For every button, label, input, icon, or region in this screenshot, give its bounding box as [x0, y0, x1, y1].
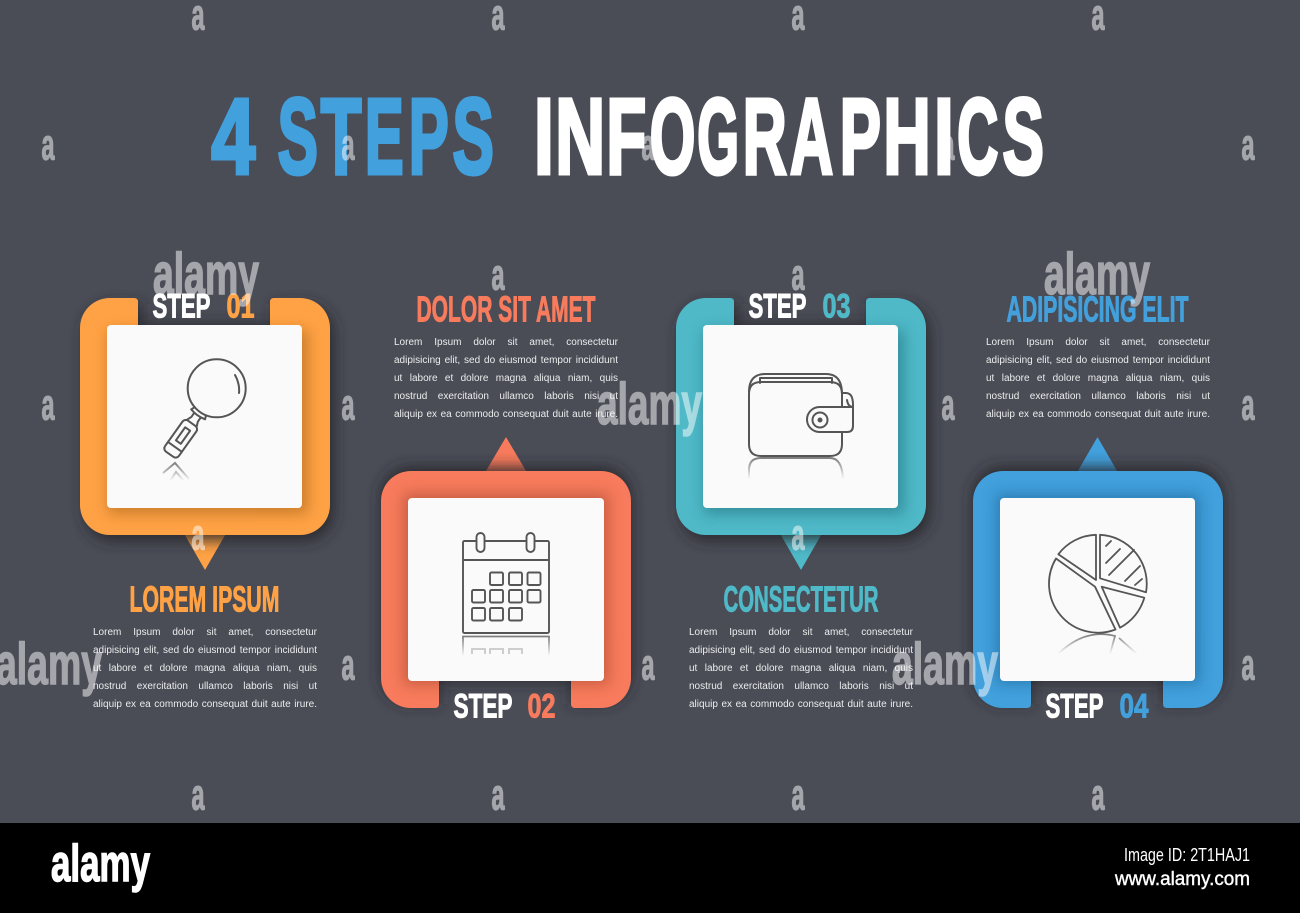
icon: wallet — [749, 374, 853, 456]
text: step 4 description: adipisicing elit, sed do eiusmod tempor incididunt — [986, 355, 1210, 366]
text: step 3 description: aliquip ex ea commodo consequat duit aute irure. — [689, 699, 913, 710]
icon: calendar — [463, 533, 549, 633]
footer logo: alamy — [51, 835, 150, 893]
label: step 02: 02 — [528, 688, 556, 726]
heading: dolor sit amet: DOLOR SIT AMET — [416, 288, 596, 330]
text: step 3 description: adipisicing elit, sed do eiusmod tempor incididunt — [689, 645, 913, 656]
label: step 02: STEP — [454, 688, 512, 726]
watermark pattern: alamy — [153, 242, 259, 307]
text: step 2 description: aliquip ex ea commodo consequat duit aute irure. — [394, 409, 618, 420]
watermark pattern: a — [492, 770, 505, 820]
text: step 1 description: adipisicing elit, sed do eiusmod tempor incididunt — [93, 645, 317, 656]
watermark pattern: a — [1092, 770, 1105, 820]
label: step 01: 01 — [226, 288, 254, 326]
icon: magnifying glass — [163, 359, 246, 459]
watermark pattern: alamy — [1044, 242, 1150, 307]
watermark pattern: a — [1242, 640, 1255, 690]
label: step 04: STEP — [1046, 688, 1104, 726]
title: E — [365, 76, 404, 196]
text: step 2 description: adipisicing elit, sed do eiusmod tempor incididunt — [394, 355, 618, 366]
text: step 3 description: Lorem Ipsum dolor sit amet, consectetur — [689, 627, 913, 638]
heading: consectetur: CONSECTETUR — [724, 578, 878, 620]
footer bar — [0, 823, 1300, 913]
watermark pattern: alamy — [597, 372, 702, 437]
card: step 3 — [703, 325, 898, 508]
image id: Image ID: 2T1HAJ1 — [1124, 845, 1250, 865]
frame: step 1 — [80, 298, 330, 535]
pointer: step 3 — [778, 530, 824, 570]
title: F — [606, 76, 646, 196]
label: step 03: 03 — [822, 288, 850, 326]
icon reflection: magnifying glass — [163, 463, 189, 481]
watermark pattern: a — [942, 380, 955, 430]
watermark pattern: a — [792, 510, 805, 560]
title: S — [1002, 76, 1044, 196]
title: T — [321, 76, 361, 196]
title: I — [934, 76, 954, 196]
card shadow: step 1 — [108, 330, 308, 514]
text: step 4 description: nostrud exercitation ullamco laboris nisi ut — [986, 391, 1210, 402]
frame shadow: step 4 — [973, 467, 1223, 704]
text: step 2 description: ut labore et dolore magna aliqua niam, quis — [394, 373, 618, 384]
title: P — [840, 76, 881, 196]
frame shadow: step 2 — [381, 467, 631, 704]
frame shadow: step 3 — [680, 304, 930, 541]
watermark pattern: a — [642, 640, 655, 690]
icon reflection: pie chart — [1058, 634, 1137, 654]
title: S — [452, 76, 494, 196]
watermark pattern: a — [792, 250, 805, 300]
title: P — [409, 76, 449, 196]
heading: lorem ipsum: LOREM IPSUM — [130, 578, 280, 620]
title: H — [883, 76, 931, 196]
card shadow: step 3 — [704, 330, 904, 514]
text: step 3 description: ut labore et dolore magna aliqua niam, quis — [689, 663, 913, 674]
text: step 2 description — [394, 334, 618, 424]
title: N — [555, 76, 605, 196]
watermark pattern: a — [192, 770, 205, 820]
watermark pattern: a — [342, 380, 355, 430]
watermark pattern: a — [942, 120, 955, 170]
panel: step 3 — [676, 288, 930, 714]
pointer: step 1 — [182, 530, 228, 570]
title: C — [957, 76, 998, 196]
watermark pattern: a — [342, 120, 355, 170]
text: step 3 description — [689, 624, 913, 714]
watermark pattern: a — [342, 640, 355, 690]
title: A — [790, 76, 833, 196]
card: step 2 — [408, 498, 604, 681]
frame: step 3 — [676, 298, 926, 535]
frame shadow: step 1 — [84, 304, 334, 541]
text: step 4 description: ut labore et dolore magna aliqua niam, quis — [986, 373, 1210, 384]
icon reflection: calendar — [463, 636, 549, 656]
card shadow: step 2 — [404, 494, 608, 684]
panel: step 1 — [80, 288, 334, 714]
text: step 2 description: Lorem Ipsum dolor sit amet, consectetur — [394, 337, 618, 348]
text: step 1 description: Lorem Ipsum dolor sit amet, consectetur — [93, 627, 317, 638]
label: step 01: STEP — [152, 288, 210, 326]
title: O — [650, 76, 695, 196]
text: step 4 description: aliquip ex ea commodo consequat duit aute irure. — [986, 409, 1210, 420]
title: R — [743, 76, 787, 196]
watermark pattern: a — [1242, 120, 1255, 170]
watermark pattern: a — [1242, 380, 1255, 430]
text: step 2 description: nostrud exercitation ullamco laboris nisi ut — [394, 391, 618, 402]
title: S — [278, 76, 318, 196]
label: step 04: 04 — [1120, 688, 1149, 726]
card: step 1 — [107, 325, 302, 508]
pointer: step 4 — [1075, 437, 1120, 476]
text: step 4 description: Lorem Ipsum dolor sit amet, consectetur — [986, 337, 1210, 348]
text: step 1 description: nostrud exercitation ullamco laboris nisi ut — [93, 681, 317, 692]
watermark pattern: alamy — [0, 632, 102, 697]
icon: pie chart — [1049, 535, 1147, 633]
panel: step 4 — [973, 288, 1223, 726]
text: step 1 description — [93, 624, 317, 714]
website: www.alamy.com — [1114, 869, 1250, 890]
frame: step 4 — [973, 471, 1223, 708]
label: step 03: STEP — [748, 288, 806, 326]
frame: step 2 — [381, 471, 631, 708]
watermark pattern: a — [42, 380, 55, 430]
title: 4 — [211, 76, 255, 196]
card: step 4 — [1000, 498, 1195, 681]
text: step 4 description — [986, 334, 1210, 424]
card shadow: step 4 — [996, 494, 1200, 684]
watermark pattern: a — [792, 770, 805, 820]
title — [211, 76, 1044, 196]
title: G — [697, 76, 739, 196]
panel: step 2 — [381, 288, 631, 726]
icon reflection: wallet — [749, 458, 843, 479]
text: step 1 description: ut labore et dolore magna aliqua niam, quis — [93, 663, 317, 674]
text: step 1 description: aliquip ex ea commodo consequat duit aute irure. — [93, 699, 317, 710]
text: step 3 description: nostrud exercitation ullamco laboris nisi ut — [689, 681, 913, 692]
title: I — [534, 76, 554, 196]
watermark pattern: a — [492, 250, 505, 300]
watermark pattern: a — [42, 120, 55, 170]
pointer: step 2 — [483, 437, 529, 476]
watermark pattern: alamy — [892, 632, 998, 697]
watermark pattern: a — [192, 510, 205, 560]
watermark pattern: a — [642, 120, 655, 170]
